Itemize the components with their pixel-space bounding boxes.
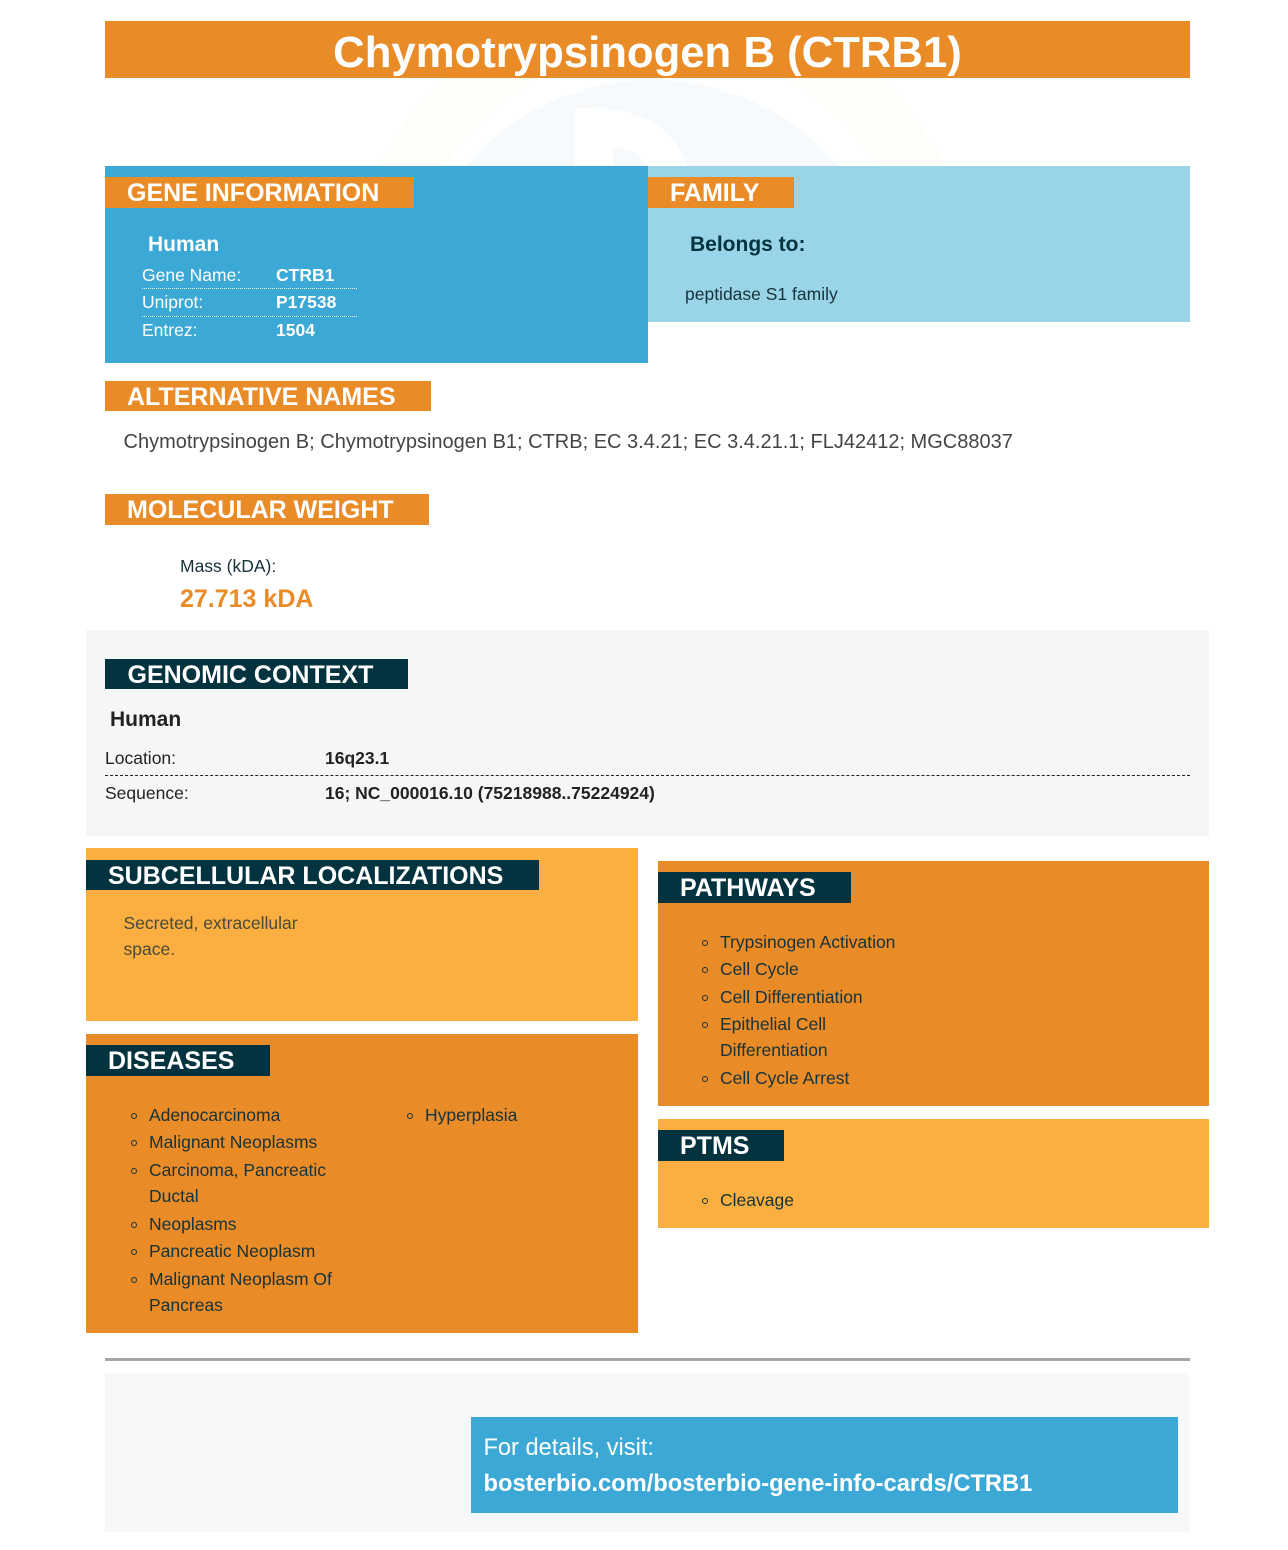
divider — [105, 1358, 1190, 1361]
row: entrez — [142, 320, 315, 340]
heading: ptms: PTMS — [680, 1132, 749, 1160]
heading: subcellular localizations: SUBCELLULAR LOCALIZATIONS — [108, 862, 503, 890]
disease list: Neoplasms — [149, 1214, 237, 1234]
family subheading: Belongs to: — [690, 233, 806, 256]
disease list: Pancreatic Neoplasm — [149, 1241, 315, 1261]
row: location: Location: — [105, 748, 176, 768]
row: uniprot: P17538 — [276, 292, 336, 312]
heading: ptms — [658, 1130, 784, 1161]
heading: diseases — [86, 1045, 270, 1076]
pathway list: Trypsinogen Activation — [720, 932, 895, 952]
disease list: Pancreas — [149, 1295, 223, 1315]
pathway list: Cell Differentiation — [720, 987, 863, 1007]
pathway list: Cell Cycle Arrest — [720, 1068, 849, 1088]
callout label: For details, visit: — [484, 1435, 654, 1461]
panel: ptms — [658, 1119, 1209, 1228]
ptm list: Cleavage — [720, 1190, 794, 1210]
pathway list: Cell Cycle — [720, 959, 799, 979]
mass value: 27.713 kDA — [180, 585, 313, 613]
heading: diseases: DISEASES — [108, 1047, 234, 1075]
watermark logo — [466, 80, 838, 166]
heading: family — [648, 177, 794, 208]
pathway list — [702, 932, 895, 1088]
row: sequence: 16; NC_000016.10 (75218988..75224924) — [325, 783, 655, 803]
callout: details link — [471, 1417, 1178, 1513]
panel: genomic context — [86, 630, 1209, 836]
heading: family: FAMILY — [670, 179, 759, 207]
mass label: Mass (kDA): — [180, 556, 276, 576]
disease list: Malignant Neoplasm Of — [149, 1269, 332, 1289]
heading: gene information: GENE INFORMATION — [127, 179, 379, 207]
callout url: bosterbio.com/bosterbio-gene-info-cards/CTRB1 — [484, 1471, 1032, 1497]
disease list: Malignant Neoplasms — [149, 1132, 317, 1152]
row: gene name: CTRB1 — [276, 265, 334, 285]
panel: family — [648, 166, 1190, 322]
disease list: Ductal — [149, 1186, 199, 1206]
row: entrez: 1504 — [276, 320, 315, 340]
section: molecular weight — [105, 494, 429, 613]
family text: peptidase S1 family — [685, 284, 838, 304]
pathway list: Differentiation — [720, 1040, 828, 1060]
heading: molecular weight: MOLECULAR WEIGHT — [127, 496, 394, 524]
pathway list: Epithelial Cell — [720, 1014, 826, 1034]
localization text: Secreted, extracellular space. — [124, 913, 298, 959]
row: location — [105, 745, 1190, 776]
panel: gene information — [105, 166, 648, 363]
heading: alternative names: ALTERNATIVE NAMES — [127, 383, 396, 411]
row: sequence: Sequence: — [105, 783, 189, 803]
panel: pathways — [658, 861, 1209, 1106]
heading: pathways — [658, 872, 851, 903]
row: location: 16q23.1 — [325, 748, 389, 768]
title banner: Chymotrypsinogen B (CTRB1) — [333, 28, 962, 77]
row: sequence — [105, 783, 655, 803]
disease list — [131, 1105, 518, 1315]
panel: subcellular localizations — [86, 848, 638, 1021]
panel: diseases — [86, 1034, 638, 1333]
disease list: Hyperplasia — [425, 1105, 517, 1125]
row: gene name — [142, 262, 357, 289]
disease list: Carcinoma, Pancreatic — [149, 1160, 326, 1180]
heading: genomic context: GENOMIC CONTEXT — [128, 661, 373, 689]
disease list: Adenocarcinoma — [149, 1105, 280, 1125]
row: uniprot — [142, 289, 357, 317]
row: gene name: Gene Name: — [142, 265, 241, 285]
section: alternative names — [105, 381, 1013, 453]
species label: Human — [148, 233, 219, 256]
row: entrez: Entrez: — [142, 320, 197, 340]
heading: pathways: PATHWAYS — [680, 874, 816, 902]
title banner — [105, 21, 1190, 78]
alternative names text: Chymotrypsinogen B; Chymotrypsinogen B1; CTRB; EC 3.4.21; EC 3.4.21.1; FLJ42412; MGC88037 — [124, 431, 1013, 453]
row: uniprot: Uniprot: — [142, 292, 203, 312]
panel: footer — [105, 1373, 1190, 1532]
species label: Human — [110, 708, 181, 731]
